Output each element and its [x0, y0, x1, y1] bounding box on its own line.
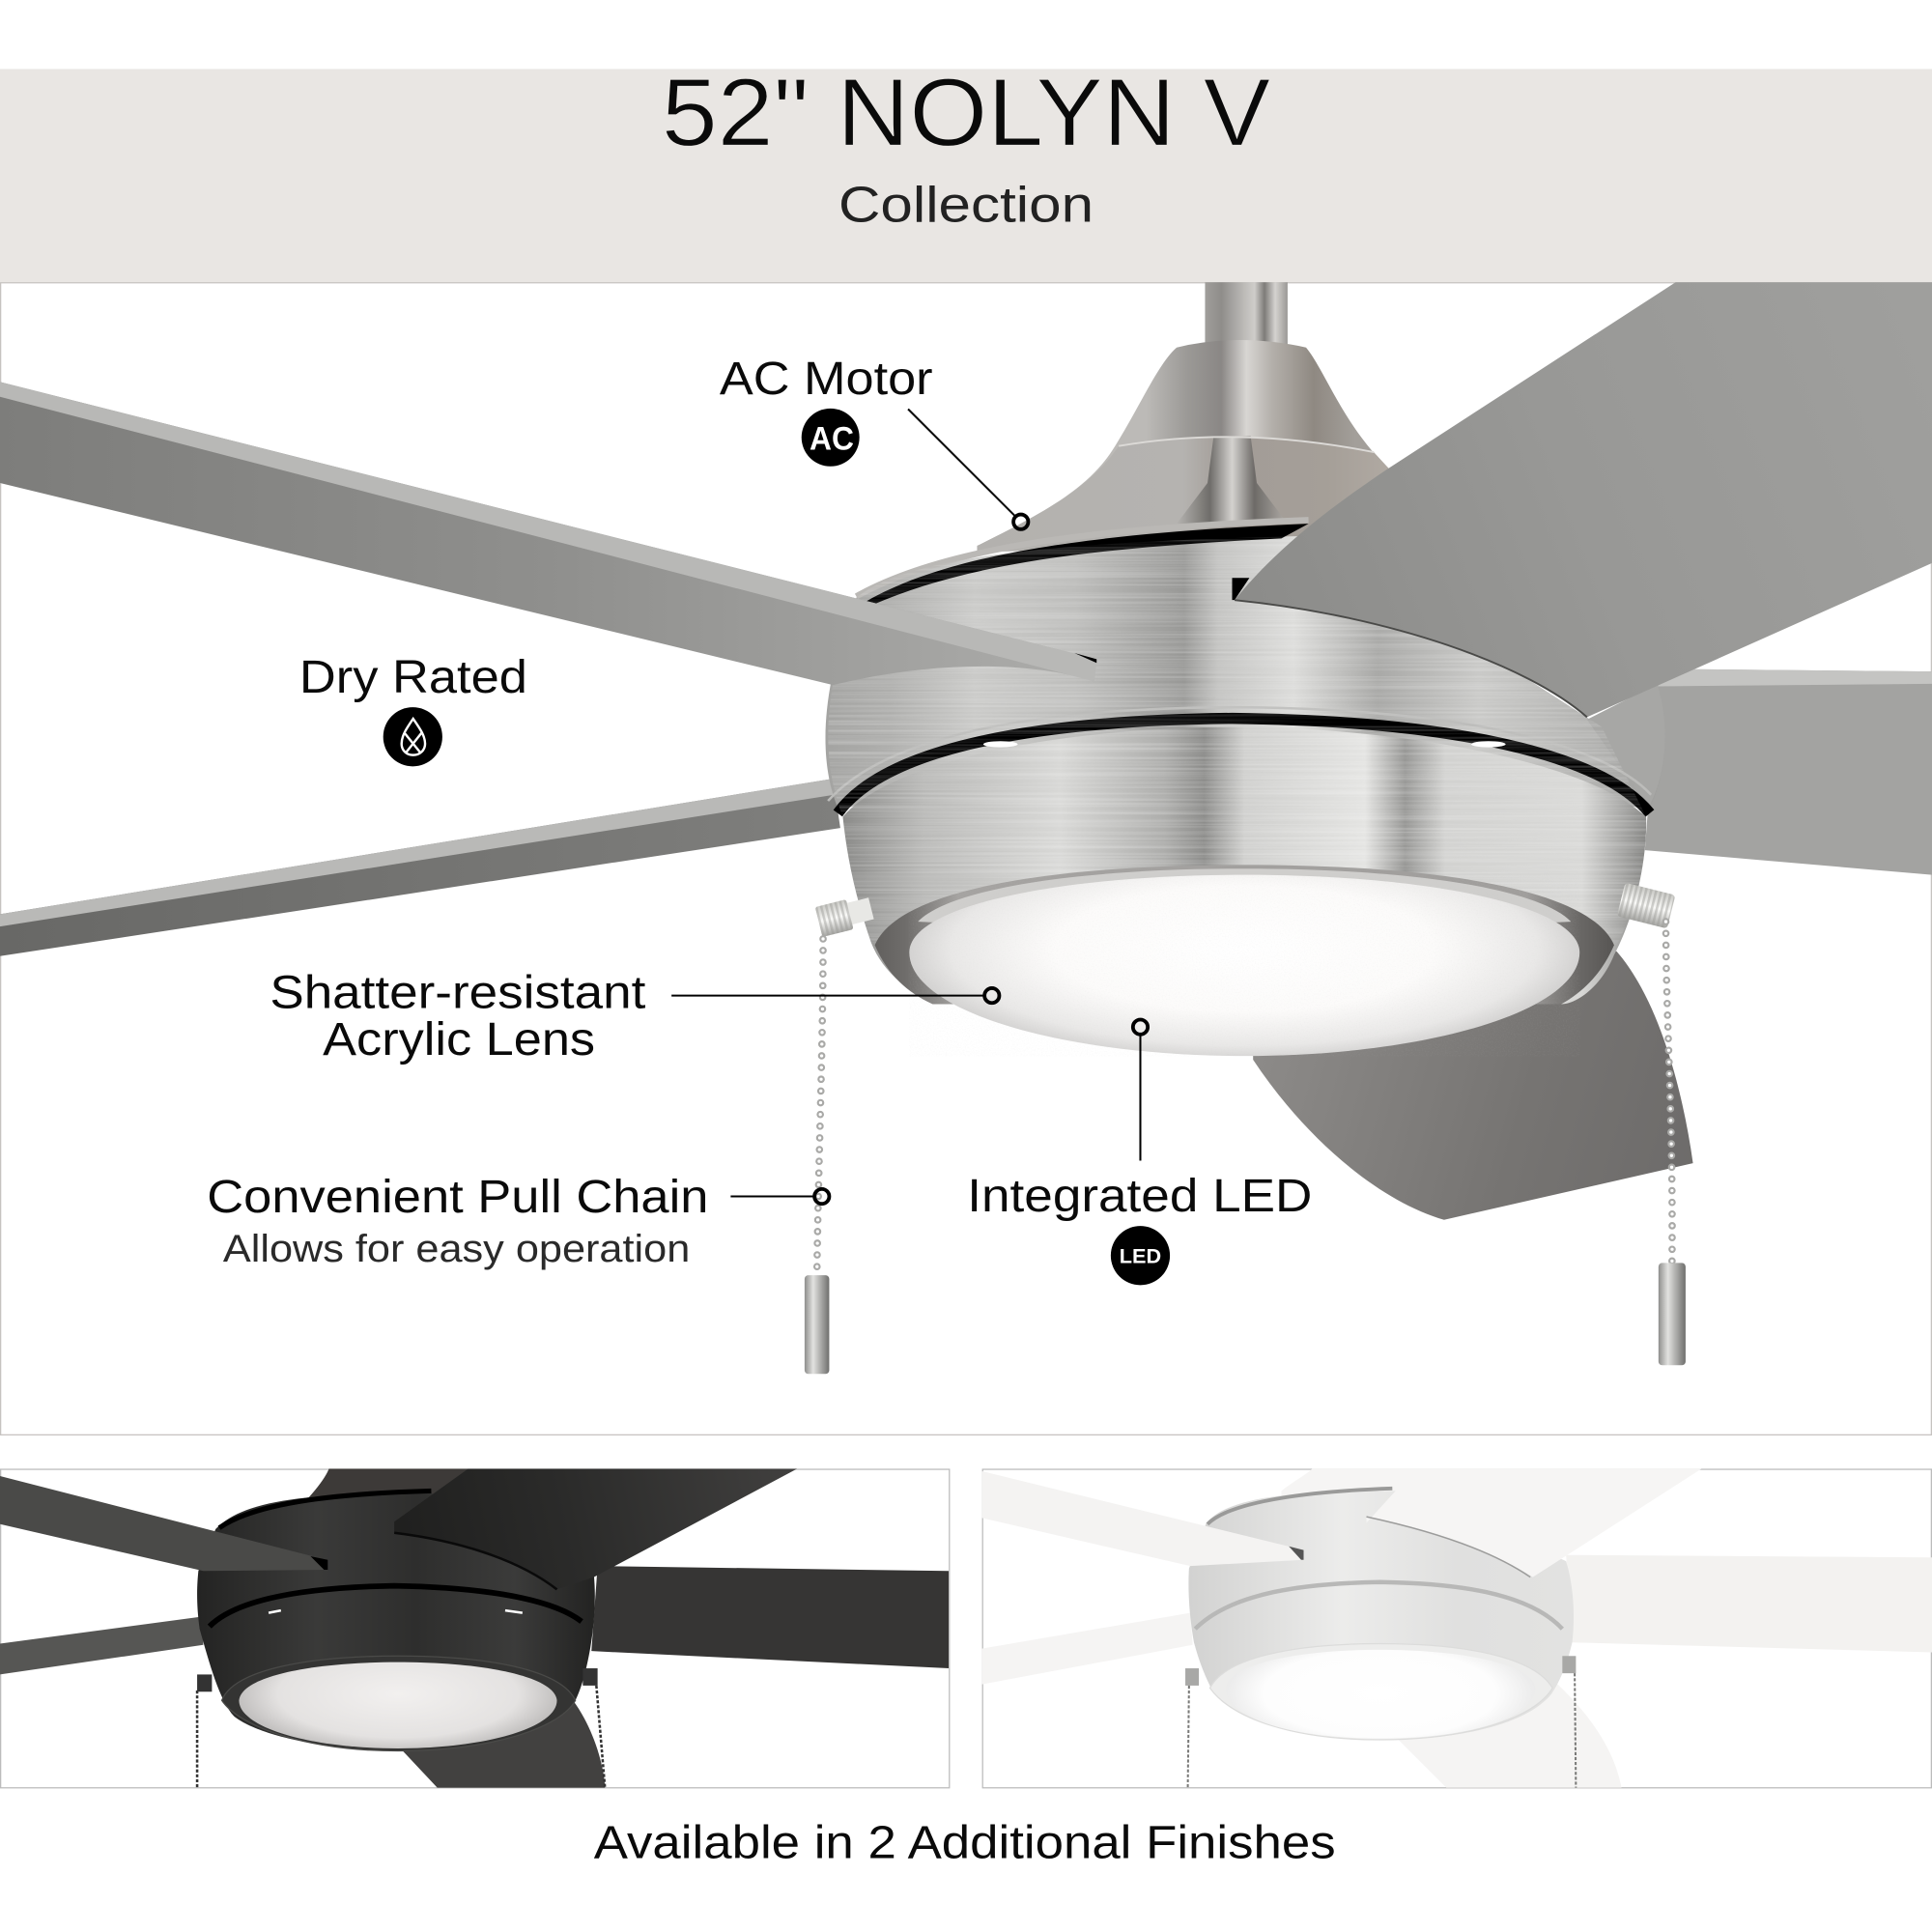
brushed metal texture — [813, 529, 1663, 961]
footer caption: Available in 2 Additional Finishes — [594, 1816, 1336, 1868]
subtitle: Collection — [838, 178, 1094, 234]
header band — [0, 69, 1932, 282]
callout: AC Motor: AC — [810, 421, 854, 458]
white bottom blade — [1397, 1681, 1622, 1788]
black bottom blade — [401, 1700, 605, 1788]
white pull chains — [1185, 1656, 1576, 1788]
callout: Shatter-resistant Acrylic Lens — [270, 966, 999, 1065]
matte section right of housing — [1587, 687, 1665, 786]
callout: Integrated LED: LED — [1120, 1243, 1161, 1267]
white vents — [1195, 1489, 1562, 1629]
black vents — [210, 1491, 582, 1627]
lens rim — [875, 865, 1614, 1005]
pull chain: right — [1617, 883, 1686, 1365]
upper rim and vent — [856, 520, 1309, 605]
white rim — [1210, 1644, 1552, 1740]
callout: Integrated LED — [967, 1019, 1312, 1285]
callout: AC Motor — [720, 353, 1028, 529]
callout: Convenient Pull Chain — [207, 1171, 829, 1270]
blade: lower left — [0, 779, 840, 956]
black lower left blade — [0, 1616, 203, 1674]
panel: black finish — [0, 1468, 950, 1788]
black rim — [222, 1656, 576, 1750]
callout: Shatter-resistant Acrylic Lens: Acrylic Lens — [323, 1013, 595, 1065]
callout: Dry Rated — [299, 651, 527, 766]
callout: Convenient Pull Chain: Allows for easy operation — [223, 1228, 690, 1270]
black upper left blade — [0, 1476, 327, 1571]
callout: Shatter-resistant Acrylic Lens: Shatter-resistant — [270, 966, 646, 1018]
callout: Dry Rated: Dry Rated — [299, 651, 527, 703]
blade: bottom — [1253, 936, 1693, 1220]
black canopy — [309, 1468, 468, 1497]
lower housing drum — [842, 727, 1646, 1005]
blade: upper right — [1233, 282, 1932, 717]
white housing — [1188, 1491, 1574, 1740]
downrod — [1205, 282, 1288, 344]
title: 52" NOLYN V — [662, 60, 1270, 167]
white finish lens — [1244, 1650, 1516, 1739]
white upper left blade — [982, 1471, 1303, 1566]
white canopy — [1281, 1468, 1416, 1495]
black right blade — [591, 1566, 949, 1668]
fan illustration: brushed nickel — [0, 282, 1932, 1374]
black upper right blade — [394, 1468, 797, 1589]
acrylic lens — [909, 875, 1579, 1056]
callout: Integrated LED: Integrated LED — [967, 1170, 1312, 1222]
white lower left blade — [982, 1613, 1193, 1685]
black finish lens — [239, 1662, 557, 1748]
white upper right blade — [1367, 1468, 1701, 1577]
black pull chains — [197, 1668, 605, 1788]
blade: upper left — [0, 382, 1096, 685]
vent slot with LED glints — [828, 707, 1651, 813]
blade: far right — [1645, 669, 1932, 875]
pull chain: left — [805, 894, 875, 1374]
motor housing: upper drum — [825, 536, 1665, 810]
callout: Convenient Pull Chain: Convenient Pull Chain — [207, 1171, 708, 1223]
callout: AC Motor: AC Motor — [720, 353, 933, 405]
icon: water drop — [402, 719, 425, 755]
black housing — [197, 1493, 595, 1749]
panel: white finish — [982, 1468, 1932, 1788]
white right blade — [1566, 1555, 1932, 1652]
panel: main fan view — [0, 282, 1932, 1435]
canopy — [977, 340, 1389, 552]
